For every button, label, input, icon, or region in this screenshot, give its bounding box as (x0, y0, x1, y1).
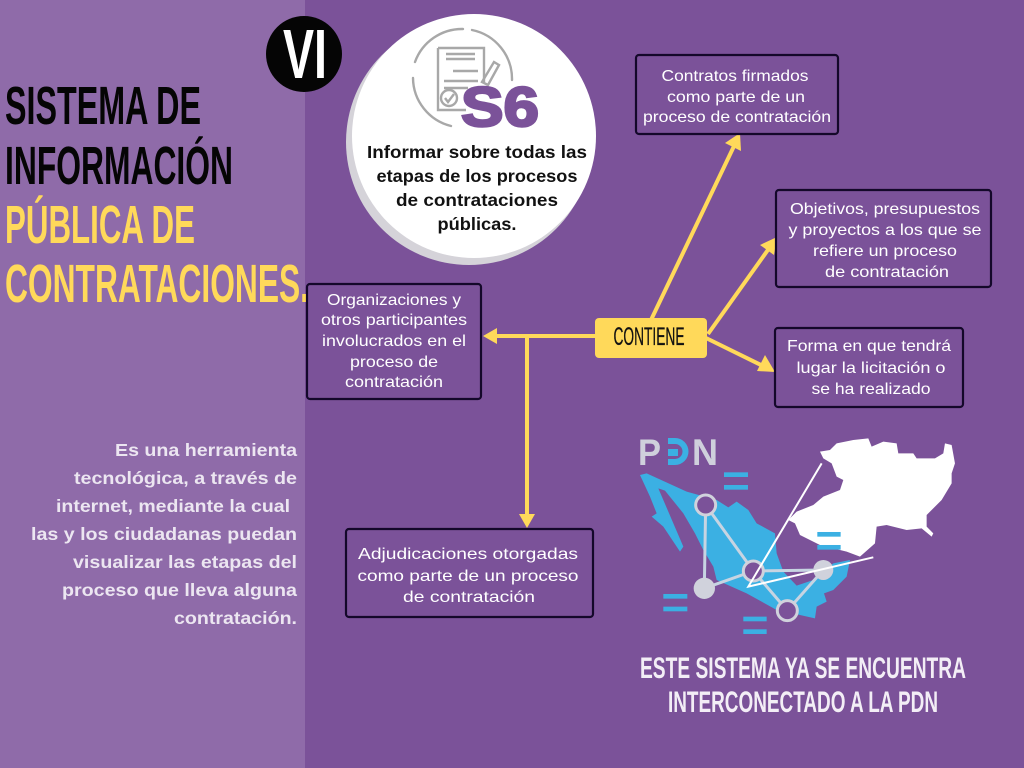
box: organizaciones: contratación (345, 374, 443, 391)
S6 description: etapas de los procesos (376, 166, 578, 186)
logo: PDN: P (638, 432, 661, 473)
description paragraph: internet, mediante la cual (56, 496, 290, 516)
box: forma: Forma en que tendrá (787, 338, 951, 355)
box: organizaciones: otros participantes (321, 312, 467, 329)
Mexico shape (640, 473, 850, 618)
title: INFORMACIÓN (5, 136, 233, 196)
closing statement (640, 652, 966, 719)
box: contratos firmados: proceso de contratación (643, 109, 831, 126)
title (5, 76, 309, 314)
label: S6: S6 (461, 75, 539, 138)
S6 description: públicas. (438, 214, 516, 234)
box: adjudicaciones: Adjudicaciones otorgadas (358, 546, 578, 563)
left panel (0, 0, 305, 768)
circle: S6 (346, 14, 596, 265)
badge: VI: VI (283, 15, 327, 93)
box: adjudicaciones: como parte de un proceso (358, 568, 579, 585)
map: Michoacán with pointer lines (663, 438, 955, 634)
icon: contract document (413, 29, 512, 126)
logo: PDN (638, 432, 718, 473)
box: objetivos: y proyectos a los que se (788, 222, 982, 239)
description paragraph: tecnológica, a través de (74, 468, 297, 488)
network nodes (694, 495, 833, 621)
title: PÚBLICA DE (5, 195, 195, 255)
description paragraph: Es una herramienta (115, 440, 297, 460)
box: organizaciones: involucrados en el (322, 333, 466, 350)
title: CONTRATACIONES. (5, 254, 309, 314)
description paragraph: contratación. (174, 608, 297, 628)
label: CONTIENE: CONTIENE (614, 323, 684, 351)
logo: PDN: N (692, 432, 718, 473)
title: SISTEMA DE (5, 76, 201, 136)
network links (704, 505, 823, 611)
box: adjudicaciones: de contratación (403, 589, 535, 606)
S6 description: de contrataciones (396, 190, 558, 210)
box: contratos firmados (636, 55, 838, 134)
description paragraph: las y los ciudadanas puedan (31, 524, 297, 544)
box: contratos firmados: Contratos firmados (662, 68, 808, 85)
box: organizaciones: Organizaciones y (327, 292, 461, 309)
box: objetivos: Objetivos, presupuestos (790, 201, 980, 218)
description paragraph: visualizar las etapas del (73, 552, 297, 572)
dashes (663, 472, 841, 634)
arrows from CONTIENE (483, 133, 777, 528)
S6 description (367, 142, 587, 234)
box: objetivos: refiere un proceso (813, 243, 957, 260)
box: organizaciones: proceso de (350, 354, 438, 371)
description paragraph: proceso que lleva alguna (62, 580, 297, 600)
label: CONTIENE (595, 318, 707, 358)
box: objetivos (776, 190, 991, 287)
box: forma: se ha realizado (812, 381, 931, 398)
S6 description: Informar sobre todas las (367, 142, 587, 162)
box: organizaciones (307, 284, 481, 399)
box: adjudicaciones (346, 529, 593, 617)
box: contratos firmados: como parte de un (667, 89, 805, 106)
box: objetivos: de contratación (825, 264, 949, 281)
box: forma: lugar la licitación o (796, 360, 946, 377)
description paragraph (31, 440, 297, 628)
box: forma (775, 328, 963, 407)
map: Mexico network (640, 473, 850, 621)
